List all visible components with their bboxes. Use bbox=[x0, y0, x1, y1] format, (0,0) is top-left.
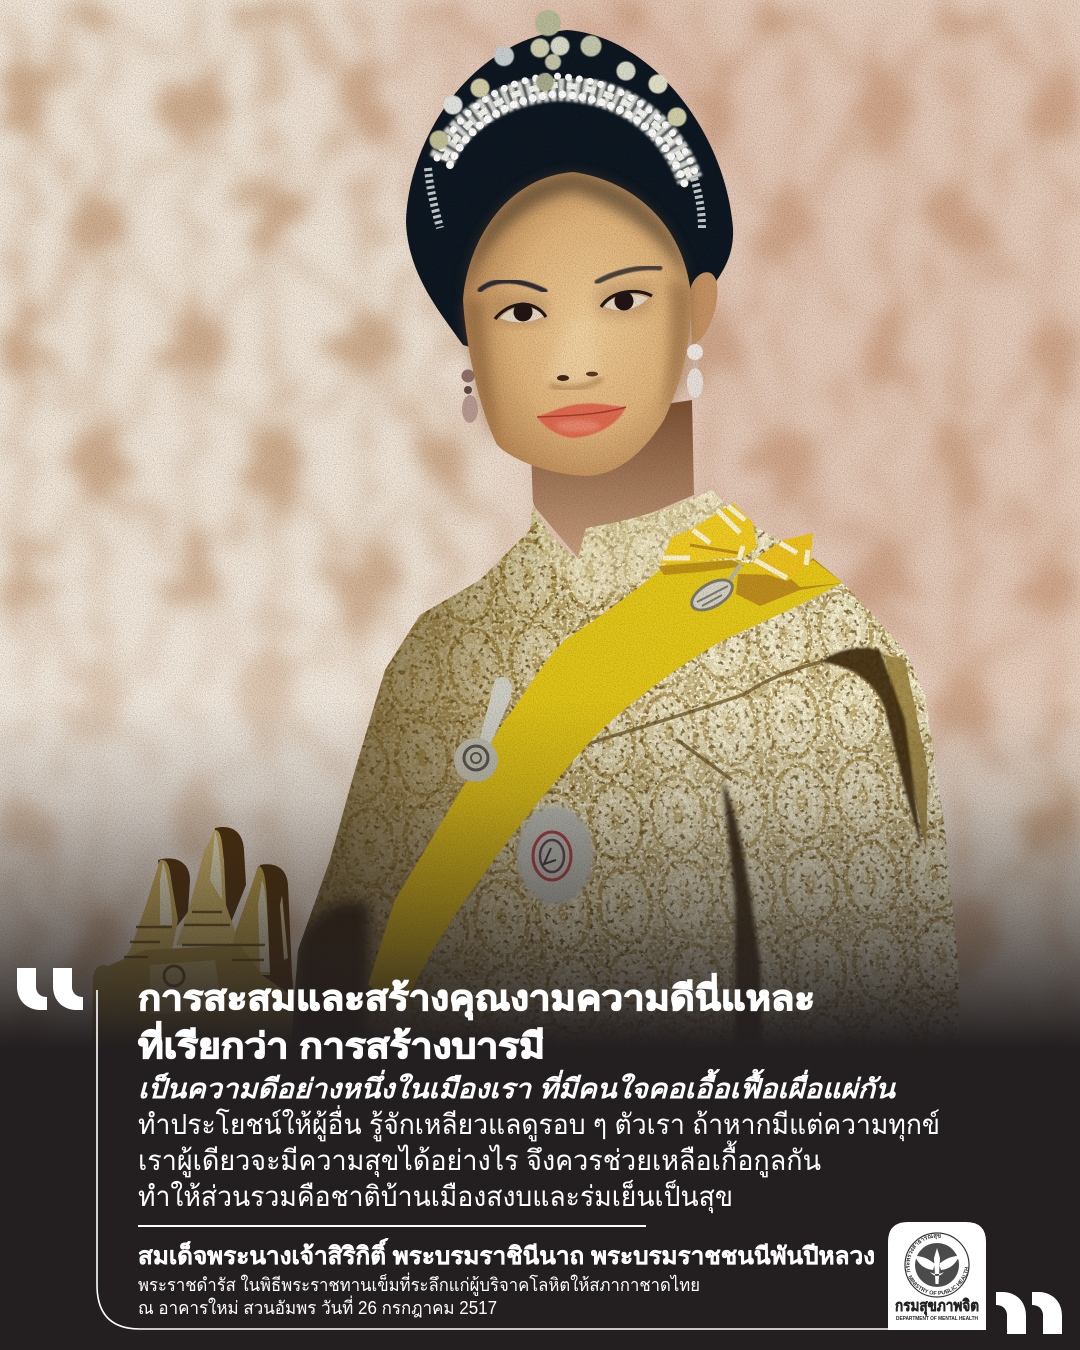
quote headline: การสะสมและสร้างคุณงามความดีนี่แหละ bbox=[138, 973, 815, 1020]
spire 1 front bbox=[122, 860, 178, 985]
film grain bbox=[0, 0, 1080, 1060]
attribution name: สมเด็จพระนางเจ้าสิริกิติ์ พระบรมราชินีนาถ พระบรมราชชนนีพันปีหลวง bbox=[138, 1238, 875, 1270]
divider bbox=[138, 1225, 646, 1227]
robe base bbox=[293, 490, 959, 1036]
tiara leaf band bbox=[442, 88, 690, 180]
attribution source: พระราชดำรัส ในพิธีพระราชทานเข็มที่ระลึกแก่ผู้บริจาคโลหิตให้สภากาชาดไทย bbox=[138, 1272, 700, 1296]
tiara bbox=[428, 10, 702, 228]
quote headline: ที่เรียกว่า การสร้างบารมี bbox=[138, 1021, 545, 1066]
spire 3 front bbox=[226, 866, 270, 975]
opening quotation mark bbox=[17, 968, 83, 1010]
silver pendant on sash bbox=[685, 564, 741, 618]
quote body text: ทำให้ส่วนรวมคือชาติบ้านเมืองสงบและร่มเย็นเป็นสุข bbox=[138, 1179, 733, 1214]
portrait figure bbox=[280, 10, 980, 1060]
closing quotation mark bbox=[996, 1292, 1062, 1334]
quote body text: ทำประโยชน์ให้ผู้อื่น รู้จักเหลียวแลดูรอบ ๆ ตัวเรา ถ้าหากมีแต่ความทุกข์ bbox=[138, 1105, 940, 1142]
robe folds bbox=[295, 895, 376, 1024]
yellow ribbon bow bbox=[658, 503, 843, 606]
eyebrows bbox=[480, 268, 660, 291]
logo: Department of Mental Health: DEPARTMENT OF MENTAL HEALTH bbox=[896, 1316, 978, 1322]
yellow sash bbox=[368, 560, 842, 1005]
ceremonial gold crown object bbox=[92, 827, 300, 1060]
eye socket shadow bbox=[490, 282, 655, 326]
attribution source bbox=[138, 1272, 700, 1318]
face bbox=[463, 172, 691, 476]
star brooch bbox=[517, 806, 593, 904]
logo: Department of Mental Health: MINISTRY OF PUBLIC HEALTH bbox=[908, 1266, 968, 1295]
logo: Department of Mental Health bbox=[888, 1222, 986, 1330]
right loop bbox=[753, 533, 813, 581]
dark backs of spires bbox=[158, 827, 300, 1060]
left loop shadow bbox=[658, 560, 745, 575]
hair shadow on forehead bbox=[463, 172, 690, 300]
quote body text: เราผู้เดียวจะมีความสุขได้อย่างไร จึงควรช่วยเหลือเกื้อกูลกัน bbox=[138, 1140, 821, 1178]
attribution source: ณ อาคารใหม่ สวนอัมพร วันที่ 26 กรกฎาคม 2517 bbox=[138, 1295, 497, 1318]
quote headline bbox=[138, 973, 815, 1066]
spire 2 front bbox=[176, 830, 240, 945]
nose bbox=[546, 320, 602, 389]
quote body text bbox=[138, 1105, 940, 1214]
logo: Department of Mental Health: กระทรวงสาธารณสุข bbox=[906, 1234, 941, 1272]
italic quote line: เป็นความดีอย่างหนึ่งในเมืองเรา ที่มีคนใจคอเอื้อเฟื้อเผื่อแผ่กัน bbox=[138, 1068, 897, 1104]
left loop bbox=[660, 503, 757, 564]
earrings bbox=[462, 344, 703, 423]
eyes bbox=[495, 291, 652, 322]
neck bbox=[530, 400, 694, 558]
hair bbox=[406, 30, 733, 350]
cheek shadow bbox=[463, 280, 691, 445]
tiara tails bbox=[428, 168, 702, 228]
logo: Department of Mental Health: กรมสุขภาพจิต bbox=[895, 1297, 979, 1316]
ribbon tails bbox=[736, 558, 843, 606]
quote frame line bbox=[97, 990, 888, 1329]
ear bbox=[690, 272, 717, 345]
bottom dark gradient panel bbox=[0, 700, 1080, 1350]
lips bbox=[537, 403, 626, 438]
necklace medal bbox=[454, 677, 511, 782]
crown base with face bbox=[92, 945, 298, 1060]
